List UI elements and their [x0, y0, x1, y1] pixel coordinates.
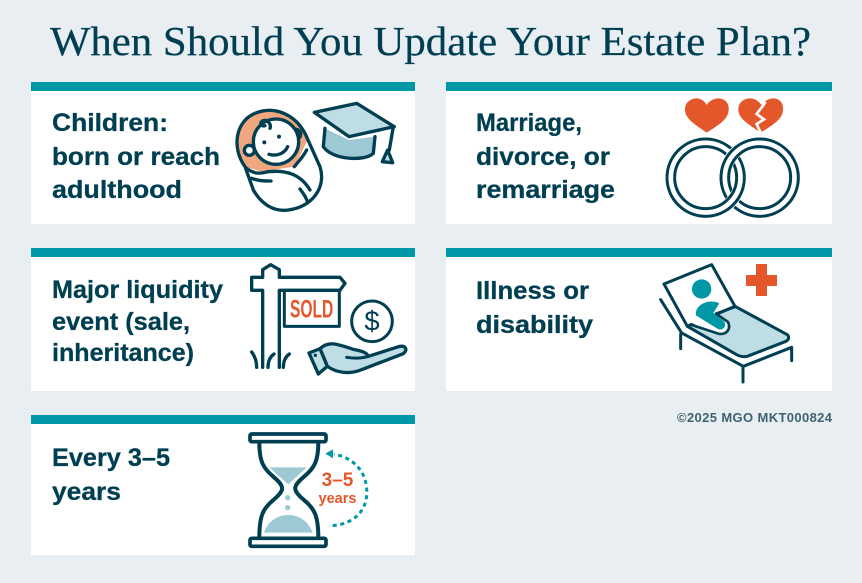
heading: every 3–5 years [52, 444, 170, 506]
heading: children [52, 109, 220, 204]
panel: illness [446, 248, 832, 391]
heading: illness [476, 277, 593, 339]
label: 3–5 years: 3–5 [322, 470, 354, 491]
heading: children: adulthood [52, 176, 182, 204]
icon: hearts [685, 98, 783, 133]
heading: liquidity event: Major liquidity [52, 276, 223, 304]
icon: graduation cap [314, 103, 394, 163]
icon: swaddled baby [237, 110, 322, 210]
heading: illness: Illness or [476, 277, 589, 305]
panel: every 3–5 years [31, 415, 415, 555]
title: When Should You Update Your Estate Plan? [50, 18, 811, 64]
panel: liquidity event [31, 248, 415, 391]
label: 3–5 years: years [319, 491, 356, 507]
icon: sold sign: SOLD [290, 295, 333, 323]
icon: coin in hand: $ [364, 306, 380, 337]
icon: dotted cycle arrow [325, 449, 367, 526]
icon: sold sign [252, 265, 345, 367]
heading: every 3–5 years: Every 3–5 [52, 444, 170, 472]
heading: liquidity event: event (sale, [52, 308, 190, 336]
heading: marriage: remarriage [476, 176, 615, 204]
heading: marriage: divorce, or [476, 143, 610, 171]
icon: medical cross [746, 264, 777, 296]
icon: interlocked rings [667, 139, 798, 216]
heading: children: Children: [52, 109, 168, 137]
panel: marriage [446, 82, 832, 224]
heading: marriage: Marriage, [476, 109, 582, 137]
heading: children: born or reach [52, 143, 220, 171]
heading: liquidity event [52, 276, 223, 367]
icon: hourglass [250, 434, 326, 546]
icon: coin in hand [309, 301, 406, 374]
heading: marriage [476, 109, 615, 204]
credit line: ©2025 MGO MKT000824 [677, 410, 833, 425]
icon: hospital bed [661, 265, 792, 382]
heading: liquidity event: inheritance) [52, 339, 194, 367]
heading: illness: disability [476, 311, 593, 339]
heading: every 3–5 years: years [52, 478, 121, 506]
panel: children [31, 82, 415, 224]
